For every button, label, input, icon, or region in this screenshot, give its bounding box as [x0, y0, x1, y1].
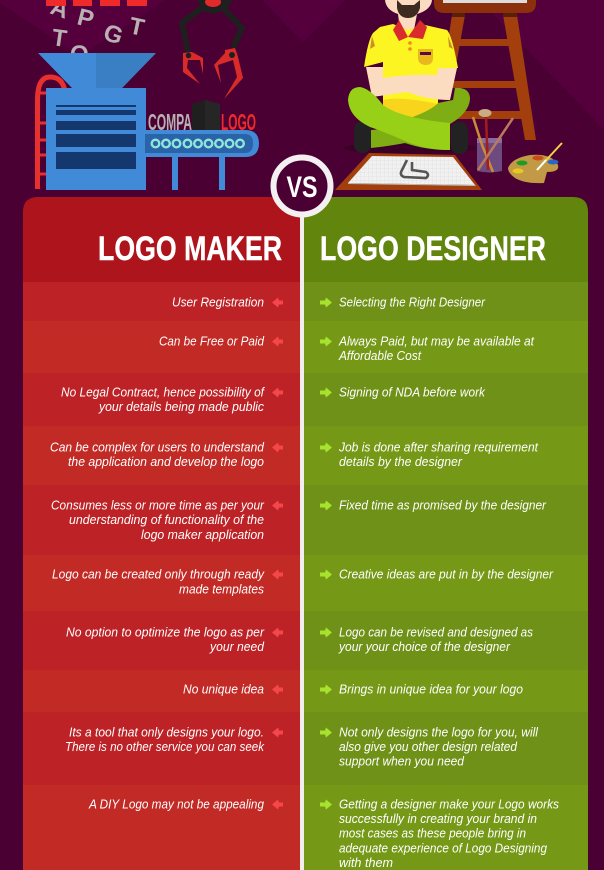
list: logo designer points — [338, 294, 559, 870]
arms — [366, 67, 457, 100]
head — [385, 0, 432, 30]
list: logo maker points: Can be Free or Paid — [159, 334, 265, 348]
letters falling into hopper: T — [50, 24, 69, 53]
list: logo maker points: understanding of functionality of the — [69, 512, 264, 527]
list: logo maker points: Can be complex for users to understand — [50, 440, 265, 454]
list: logo maker points: your details being made public — [98, 399, 264, 414]
list: logo maker points: There is no other service you can seek — [65, 739, 265, 754]
list: logo maker points: User Registration — [172, 294, 264, 310]
list: logo designer points: support when you need — [339, 754, 465, 768]
list: logo designer points: Getting a designer make your Logo works — [339, 796, 559, 812]
list: logo designer points: successfully in creating your brand in — [339, 811, 537, 826]
illustration: logo maker machine — [38, 0, 259, 190]
letters falling into hopper: P — [75, 4, 97, 34]
list: logo designer points: with them — [339, 855, 393, 870]
drawing board — [335, 153, 482, 190]
list: logo designer points: Signing of NDA before work — [339, 384, 486, 400]
list: logo designer points: Logo can be revised and designed as — [339, 624, 533, 640]
list: logo maker points — [50, 294, 265, 812]
list: logo designer points: details by the designer — [339, 454, 463, 469]
letters falling into hopper: G — [100, 19, 126, 50]
brush jar — [477, 140, 502, 172]
list: logo designer points: adequate experience of Logo Designing — [339, 840, 548, 856]
list: logo maker points: your need — [209, 639, 265, 654]
claw — [182, 0, 243, 99]
vs badge — [274, 158, 330, 214]
list: logo designer points: Job is done after sharing requirement — [338, 440, 539, 454]
icons: green arrows — [320, 298, 332, 810]
illustration: designer at easel — [335, 0, 562, 190]
list: logo designer points: most cases as these people bring in — [339, 826, 526, 840]
heading: logo maker: LOGO MAKER — [98, 230, 282, 268]
list: logo designer points: also give you other design related — [339, 739, 518, 754]
conveyor — [172, 155, 178, 190]
feet — [354, 121, 371, 153]
illustration: logo maker machine: LOGO — [221, 109, 256, 135]
letters falling into hopper: T — [127, 12, 147, 42]
panel: logo designer — [304, 197, 588, 870]
easel — [434, 0, 536, 140]
list: logo designer points: Brings in unique idea for your logo — [339, 682, 523, 696]
floor shadow — [344, 142, 476, 154]
hopper — [38, 53, 156, 88]
list: logo designer points: Affordable Cost — [338, 348, 422, 363]
vs badge: VS — [286, 171, 318, 204]
list: logo designer points: Creative ideas are put in by the designer — [339, 566, 554, 582]
list: logo maker points: A DIY Logo may not be appealing — [88, 796, 265, 812]
list: logo designer points: Not only designs the logo for you, will — [339, 724, 539, 740]
list: logo maker points: the application and develop the logo — [68, 454, 264, 469]
list: logo maker points: No unique idea — [183, 682, 264, 696]
list: logo designer points: Fixed time as promised by the designer — [339, 498, 547, 512]
list: logo maker points: No Legal Contract, hence possibility of — [61, 384, 265, 400]
list: logo maker points: Consumes less or more time as per your — [51, 498, 265, 512]
list: logo maker points: made templates — [179, 582, 264, 596]
panel: logo maker — [23, 197, 300, 870]
list: logo designer points: Always Paid, but may be available at — [338, 334, 535, 348]
list: logo maker points: No option to optimize the logo as per — [66, 624, 265, 640]
heading: logo designer: LOGO DESIGNER — [320, 230, 546, 268]
machine body — [46, 88, 146, 190]
shirt — [364, 24, 458, 118]
list: logo maker points: Its a tool that only designs your logo. — [69, 724, 264, 740]
stamp block — [192, 100, 220, 130]
list: logo maker points: logo maker application — [141, 527, 264, 542]
ladder — [38, 77, 65, 189]
legs — [371, 124, 450, 150]
list: logo designer points: your your choice of the designer — [338, 639, 511, 654]
letters falling into hopper — [46, 0, 147, 68]
icons: red arrows — [272, 298, 283, 810]
letters falling into hopper: O — [70, 41, 89, 68]
list: logo designer points: Selecting the Right Designer — [339, 294, 486, 310]
list: logo maker points: Logo can be created only through ready — [52, 566, 265, 582]
palette — [508, 155, 558, 183]
logo text on belt: COMPA — [148, 109, 192, 135]
